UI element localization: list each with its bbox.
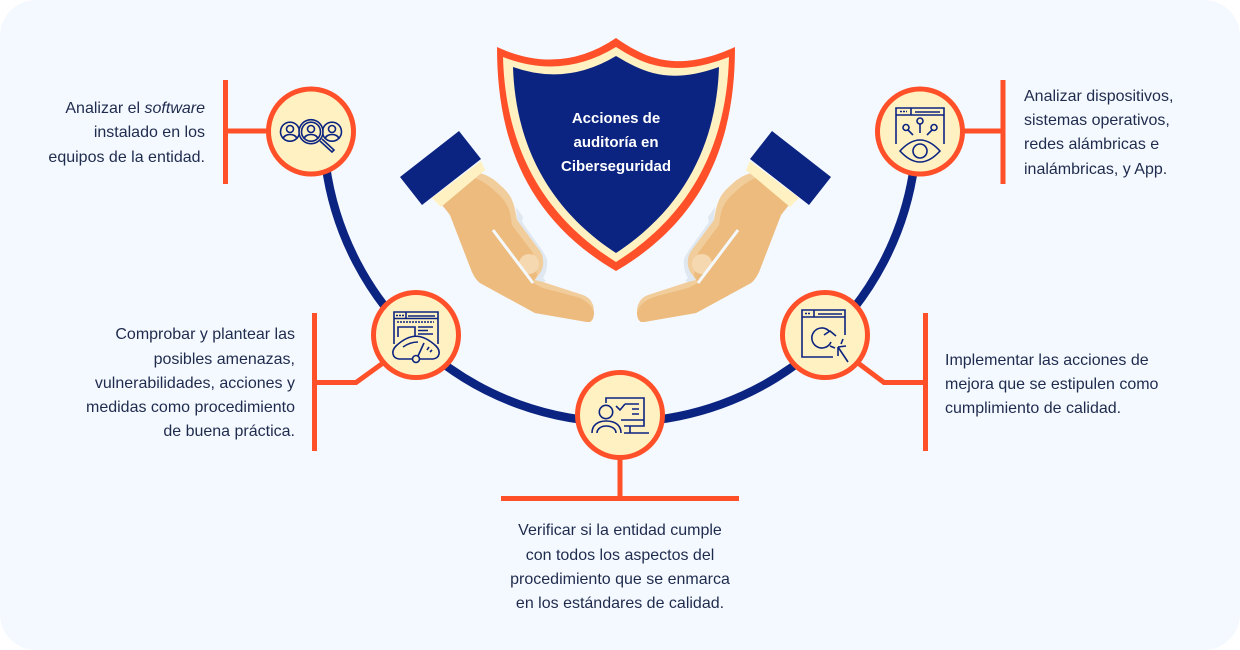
- navy arc connecting the steps: [326, 165, 914, 422]
- text: software: equipos de la entidad.: [48, 149, 205, 166]
- connector: mejora: [858, 313, 926, 451]
- text: amenazas: Comprobar y plantear las: [115, 326, 295, 343]
- right hand: [637, 131, 831, 322]
- text: mejora: Implementar las acciones de: [945, 352, 1149, 369]
- step: verificar: [578, 372, 662, 458]
- text: dispositivos: inalámbricas, y App.: [1024, 161, 1167, 178]
- icon: window with cursor: [802, 310, 848, 362]
- text: mejora: mejora que se estipulen como: [945, 376, 1159, 393]
- text: software: instalado en los: [94, 124, 205, 141]
- step: dispositivos: [878, 89, 962, 174]
- text: amenazas: medidas como procedimiento: [86, 399, 295, 416]
- connector: verificar: [501, 458, 739, 498]
- text: software: Analizar el software: [65, 100, 205, 117]
- icon: people magnifier: [280, 120, 342, 152]
- shield: [497, 38, 735, 271]
- icon: person at monitor: [592, 398, 649, 433]
- shield title: Ciberseguridad: [561, 158, 671, 175]
- text: dispositivos: redes alámbricas e: [1024, 136, 1159, 153]
- icon: window with gauge: [393, 312, 439, 362]
- connector: dispositivos: [962, 80, 1003, 184]
- text: verificar: con todos los aspectos del: [526, 547, 714, 564]
- text: verificar: en los estándares de calidad.: [516, 595, 724, 612]
- shield title: auditoría en: [573, 134, 659, 151]
- step: software: [268, 89, 354, 174]
- text: dispositivos: Analizar dispositivos,: [1024, 88, 1173, 105]
- text: dispositivos: sistemas operativos,: [1024, 112, 1170, 129]
- text: verificar: procedimiento que se enmarca: [510, 571, 730, 588]
- text: amenazas: de buena práctica.: [163, 423, 295, 440]
- text: amenazas: posibles amenazas,: [154, 351, 295, 368]
- connector: software: [226, 80, 268, 184]
- step: mejora: [782, 292, 868, 378]
- connector: amenazas: [314, 313, 383, 451]
- text: mejora: cumplimiento de calidad.: [945, 400, 1121, 417]
- icon: window with eye: [896, 108, 944, 162]
- shield title: Acciones de: [572, 110, 660, 127]
- text: verificar: Verificar si la entidad cumple: [518, 522, 722, 539]
- left hand: [400, 131, 594, 322]
- text: amenazas: vulnerabilidades, acciones y: [95, 375, 295, 392]
- step: amenazas: [374, 292, 458, 378]
